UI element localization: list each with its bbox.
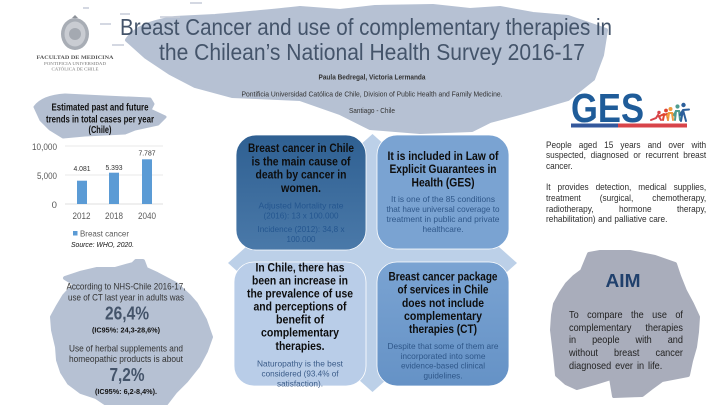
panel: prevalence increase: satisfaction). xyxy=(277,378,323,388)
panel: main cause of death: Incidence (2012): 34,8 x xyxy=(258,224,345,234)
authors and affiliation: Pontificia Universidad Católica de Chile, Division of Public Health and Family Medicine. xyxy=(242,90,502,98)
panel: package excludes CT: complementary xyxy=(404,309,482,323)
bar chart: 5.393 xyxy=(106,163,122,172)
bar chart: 4.081 xyxy=(74,164,90,173)
bar chart: 2040 xyxy=(138,210,156,221)
title brush background xyxy=(83,3,606,132)
GES description text: cancer. xyxy=(546,160,573,171)
panel: NHS-Chile statistics: Use of herbal supplements and xyxy=(69,342,183,354)
panel: main cause of death: Breast cancer in Chile xyxy=(248,141,354,155)
aim description text: diagnosed ever in life. xyxy=(569,361,662,372)
icon: crest xyxy=(61,15,89,50)
panel: included in GES law: Health (GES) xyxy=(412,176,475,190)
panel: aim background xyxy=(552,252,698,396)
panel: prevalence increase: complementary xyxy=(261,326,339,340)
authors and affiliation: Santiago - Chile xyxy=(349,106,395,115)
aim heading: AIM xyxy=(606,270,640,291)
panel: chart heading: Estimated past and future xyxy=(52,102,149,114)
panel: prevalence increase: the prevalence of use xyxy=(247,286,353,300)
GES description text: radiotherapy, hormone therapy, xyxy=(546,203,706,214)
panel: included in GES law: Explicit Guarantees in xyxy=(390,162,496,176)
icon: family xyxy=(651,103,689,121)
panel: NHS-Chile statistics: 7,2% xyxy=(110,365,144,385)
aim description text: in people with and xyxy=(569,335,683,346)
panel: package excludes CT: Despite that some of them are xyxy=(388,341,499,351)
panel: package excludes CT: does not include xyxy=(402,296,484,310)
panel: prevalence increase: therapies. xyxy=(276,339,324,353)
panel: NHS-Chile statistics: According to NHS-Chile 2016-17, xyxy=(66,280,186,292)
faculty logo xyxy=(36,15,114,72)
panel: chart heading: trends in total cases per year xyxy=(46,114,154,126)
aim description text xyxy=(569,310,683,372)
panel: package excludes CT: Breast cancer package xyxy=(388,270,498,284)
panel: package excludes CT: guidelines. xyxy=(424,370,462,380)
GES logo: GES xyxy=(571,85,644,131)
panel: NHS-Chile statistics: 26,4% xyxy=(105,304,149,324)
panel: package excludes CT: therapies (CT) xyxy=(409,322,477,336)
panel: chart heading xyxy=(35,95,165,137)
faculty logo: FACULTAD DE MEDICINA xyxy=(36,55,114,61)
matrix background diamond xyxy=(228,134,517,392)
faculty logo: CATÓLICA DE CHILE xyxy=(52,66,99,72)
panel: main cause of death: death by cancer in xyxy=(256,168,346,182)
panel: prevalence increase: Naturopathy is the best xyxy=(257,358,344,368)
GES description text: People aged 15 years and over with xyxy=(546,138,706,150)
panel: NHS-Chile statistics xyxy=(52,261,211,405)
aim description text: without breast cancer xyxy=(569,348,683,359)
panel: prevalence increase: been an increase in xyxy=(252,274,348,288)
bar chart: Source: WHO, 2020. xyxy=(71,240,134,249)
panel: main cause of death: 100.000 xyxy=(286,234,316,244)
bar chart: 0 xyxy=(52,200,57,211)
panel: main cause of death: women. xyxy=(280,181,321,195)
bar chart: 2012 xyxy=(72,210,90,221)
panel: NHS-Chile statistics: homeopathic products is about xyxy=(69,353,183,364)
authors and affiliation xyxy=(242,72,502,115)
panel: main cause of death: is the main cause of xyxy=(252,154,351,168)
panel: NHS-Chile statistics: use of CT last year in adults was xyxy=(68,292,184,302)
panel: included in GES law: that have universal coverage to xyxy=(386,204,500,214)
title: Breast Cancer and use of complementary therapies in xyxy=(120,14,612,40)
panel: package excludes CT: of services in Chile xyxy=(398,282,489,296)
panel: prevalence increase: In Chile, there has xyxy=(256,260,345,274)
faculty logo: PONTIFICIA UNIVERSIDAD xyxy=(44,62,106,66)
panel: included in GES law xyxy=(377,135,509,249)
panel: included in GES law: It is one of the 85 conditions xyxy=(391,194,495,204)
panel: main cause of death xyxy=(236,135,366,250)
GES description text: treatment (surgical, chemotherapy, xyxy=(546,192,706,203)
bar chart: 5,000 xyxy=(37,171,57,182)
bar chart: 7.787 xyxy=(138,148,156,158)
GES description text: It provides detection, medical supplies, xyxy=(546,181,706,192)
panel: NHS-Chile statistics: (IC95%: 24,3-28,6%) xyxy=(92,326,160,334)
aim description text: complementary therapies xyxy=(569,323,683,334)
chart legend: Breast cancer xyxy=(80,228,129,238)
panel: included in GES law: healthcare. xyxy=(422,224,464,234)
panel: NHS-Chile statistics: (IC95%: 6,2-8,4%). xyxy=(95,387,157,396)
panel: main cause of death: (2016): 13 x 100.000 xyxy=(264,210,339,220)
panel: chart heading: (Chile) xyxy=(88,125,112,136)
title: the Chilean’s National Health Survey 2016-17 xyxy=(159,39,585,65)
GES description text: suspected, diagnosed or recurrent breast xyxy=(546,149,706,160)
panel: prevalence increase: and perceptions of xyxy=(254,300,347,314)
panel: package excludes CT: incorporated into some xyxy=(400,351,486,361)
panel: package excludes CT: evidence-based clinical xyxy=(401,360,485,370)
title xyxy=(120,14,612,65)
panel: included in GES law: It is included in Law of xyxy=(388,149,499,163)
aim description text: To compare the use of xyxy=(569,310,683,321)
panel: prevalence increase: considered (93.4% of xyxy=(262,368,339,378)
panel: prevalence increase: benefit of xyxy=(276,312,325,326)
panel: prevalence increase xyxy=(234,260,366,388)
bar chart: 10,000 xyxy=(32,142,57,153)
panel: included in GES law: treatment in public and private xyxy=(386,214,500,224)
GES description text xyxy=(546,138,706,224)
bar chart: 2018 xyxy=(105,210,123,221)
bar chart xyxy=(32,142,163,249)
GES description text: rehabilitation) and palliative care. xyxy=(546,213,667,224)
authors and affiliation: Paula Bedregal, Victoria Lermanda xyxy=(318,72,426,82)
panel: main cause of death: Adjusted Mortality rate xyxy=(258,200,344,210)
panel: package excludes CT xyxy=(377,262,509,386)
